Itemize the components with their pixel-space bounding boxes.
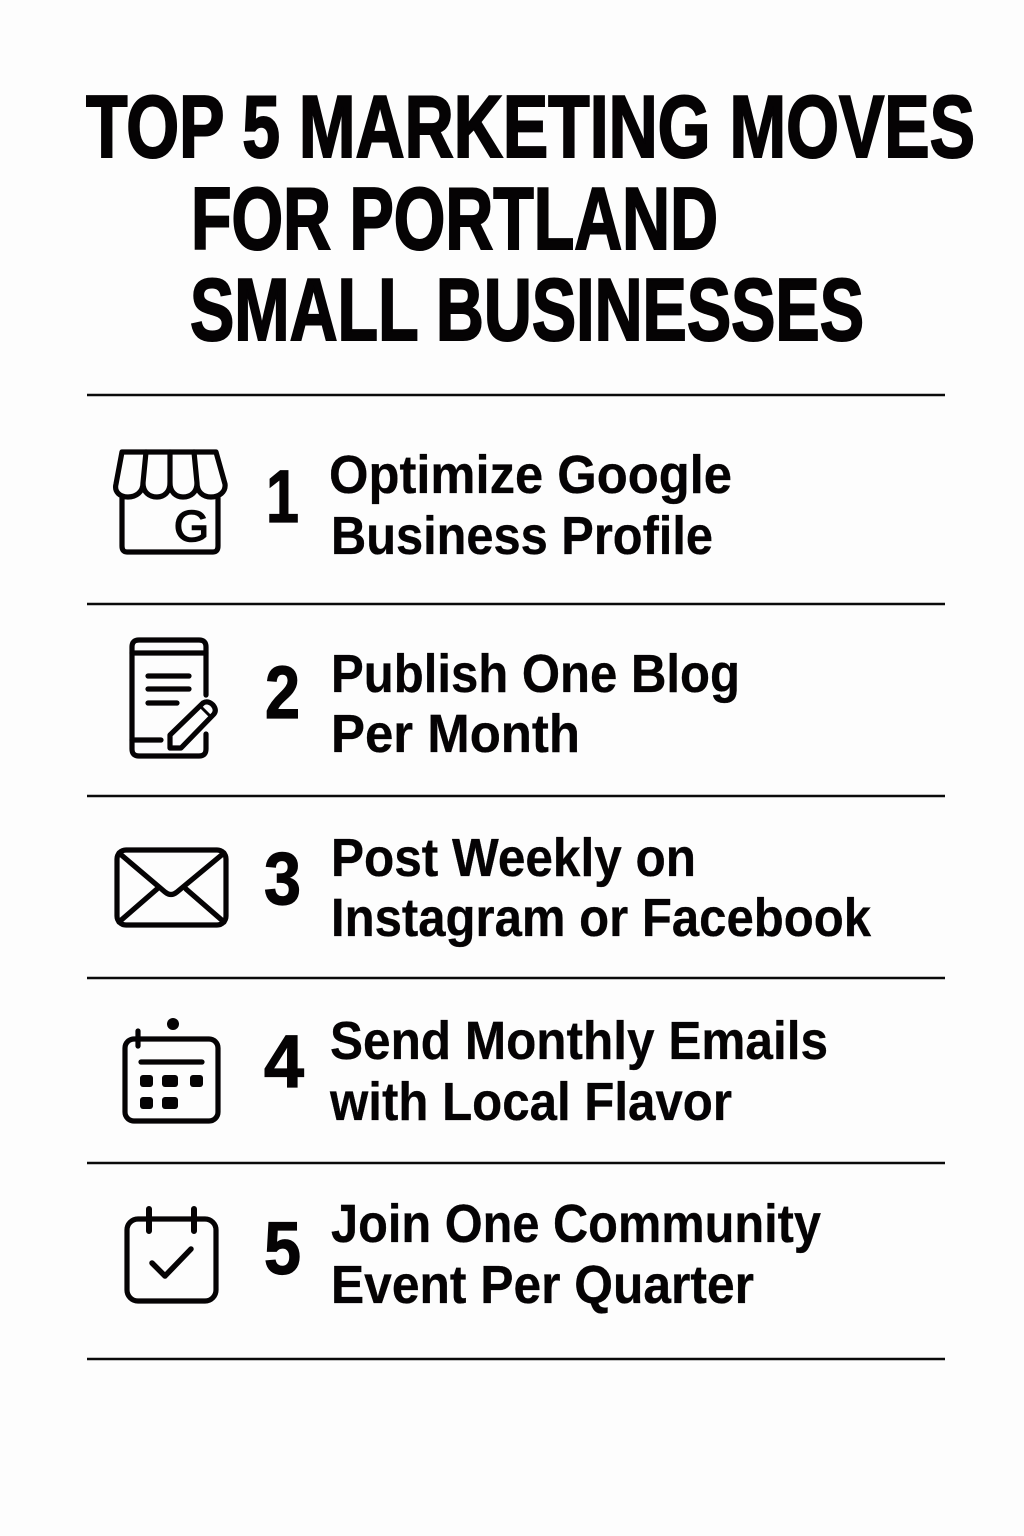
item 1: optimize google business profile [116, 445, 732, 566]
icon: calendar with check [127, 1209, 216, 1301]
number 4: 4 [264, 1020, 304, 1103]
text: item 3: Instagram or Facebook [331, 888, 872, 948]
icon: storefront with G: G [174, 502, 209, 551]
item 5: join community event [127, 1194, 821, 1315]
text: item 5: Event Per Quarter [331, 1255, 754, 1315]
icon: storefront with G [116, 452, 225, 552]
number 2: 2 [265, 651, 300, 734]
text: item 5 [331, 1194, 821, 1315]
text: item 3: Post Weekly on [331, 828, 696, 888]
text: item 1: Business Profile [331, 506, 713, 566]
text: item 4: with Local Flavor [329, 1072, 732, 1132]
icon: envelope [117, 850, 226, 925]
title [86, 77, 975, 359]
text: item 2 [331, 644, 740, 764]
text: item 1 [329, 445, 732, 566]
text: item 4: Send Monthly Emails [330, 1011, 828, 1071]
number 5: 5 [264, 1207, 301, 1290]
text: item 3 [331, 828, 872, 948]
number 3: 3 [264, 837, 301, 920]
text: item 4 [329, 1011, 828, 1132]
item 2: publish one blog [132, 640, 740, 764]
item 4: send monthly emails [125, 1011, 828, 1132]
icon: calendar with dot [125, 1018, 218, 1121]
text: item 1: Optimize Google [329, 445, 732, 505]
item 3: post weekly [117, 828, 872, 948]
text: item 2: Publish One Blog [331, 644, 740, 704]
title: FOR PORTLAND [191, 169, 718, 268]
number 1: 1 [266, 455, 299, 538]
icon: document with pencil [132, 640, 215, 756]
text: item 5: Join One Community [331, 1194, 821, 1254]
text: item 2: Per Month [331, 704, 580, 764]
